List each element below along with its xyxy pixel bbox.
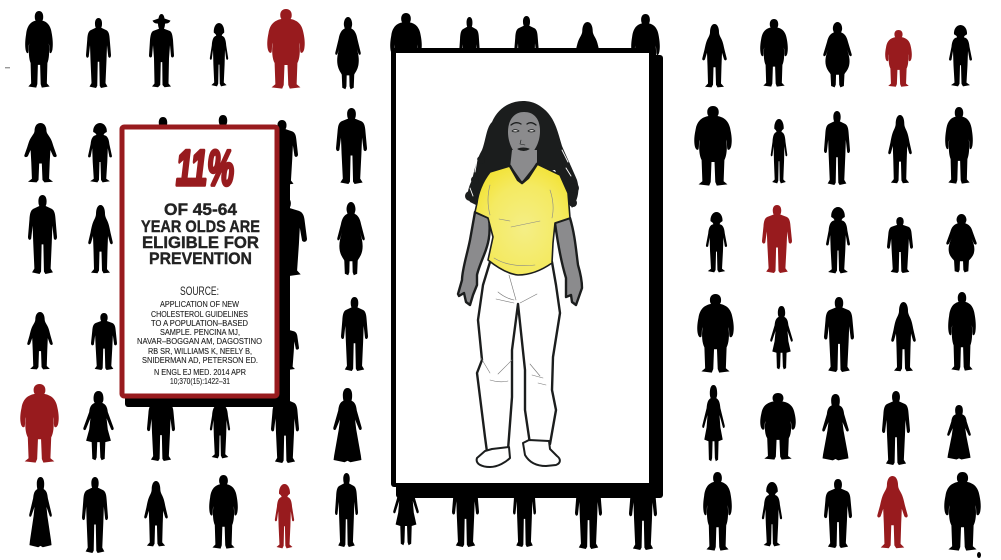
person [702,24,727,87]
shirt collar [510,164,537,183]
shirt creases [488,185,553,266]
person [703,472,732,551]
person [341,297,368,371]
crowd: left block [20,9,368,553]
statistic description [141,200,260,268]
left arm [458,212,490,305]
red highlighted person [267,9,305,89]
person [24,123,57,182]
person behind card [271,390,299,463]
red highlighted person [877,476,908,548]
person [83,391,114,460]
person [91,313,117,370]
statistic description: ELIGIBLE FOR [142,233,259,252]
person [336,108,367,184]
panel: statistic card [122,127,290,407]
right arm [555,218,582,305]
source citation: RB SR, WILLIAMS K, NEELY B, [148,346,252,356]
person [210,23,228,86]
source citation: SNIDERMAN AD, PETERSON ED. [142,355,258,365]
source citation: NAVAR–BOGGAN AM, DAGOSTINO [137,336,262,346]
person [28,195,57,274]
red highlighted person [20,384,59,463]
face [508,112,540,160]
person [946,214,977,272]
person in gown [333,388,362,462]
neck [510,150,537,184]
person [575,472,602,549]
person [771,119,787,183]
source citation [137,299,262,386]
right shoe [523,440,560,466]
person [949,25,972,86]
person behind card [262,197,307,276]
woman illustration [458,101,582,467]
source citation: 10;370(15):1422–31 [170,376,230,386]
source citation: APPLICATION OF NEW [160,299,240,309]
person [694,106,732,186]
person [824,297,854,372]
person in gown [822,394,849,460]
person in dress [770,306,793,369]
statistic description: PREVENTION [149,249,252,268]
source citation: N ENGL EJ MED. 2014 APR [154,367,246,377]
person with hat [824,111,850,185]
crowd: behind centre panel [390,13,660,550]
hair [465,101,579,208]
source citation: CHOLESTEROL GUIDELINES [151,309,248,319]
person [335,17,361,89]
person [25,11,53,88]
person behind card [266,120,298,185]
person [945,107,973,184]
person [826,207,850,273]
red highlighted person [762,205,792,273]
person behind card [147,392,175,461]
person [823,22,852,87]
person [944,472,981,551]
red highlighted person [275,484,294,548]
red highlighted person [885,30,912,87]
person [86,18,111,88]
left shoe [477,447,510,467]
person [947,405,971,459]
person [390,13,422,88]
person [631,14,660,89]
person [824,479,852,548]
person behind card [210,392,230,458]
person [513,472,536,547]
person [88,205,113,273]
person [27,312,53,369]
pants [477,262,560,452]
facial features [511,123,536,150]
panel: centre portrait frame [391,48,663,498]
person [706,212,727,272]
statistic description: OF 45-64 [164,200,238,219]
person [573,22,602,91]
person [144,481,168,546]
person [887,217,913,273]
person [891,302,916,371]
statistic description: YEAR OLDS ARE [141,217,260,236]
person [29,477,52,547]
person [760,393,796,460]
person [452,472,479,547]
person behind card [270,323,299,370]
pants creases [481,275,546,385]
source citation: TO A POPULATION–BASED [151,318,248,328]
crowd: right block [694,19,981,551]
person [82,477,108,553]
person [762,482,782,546]
person [629,472,657,550]
person [459,17,480,87]
person [882,391,910,465]
person [948,292,976,371]
person [702,385,725,461]
person with hat [149,14,174,87]
source heading: SOURCE: [180,286,219,298]
source citation: SAMPLE. PENCINA MJ, [160,327,240,337]
yellow shirt [475,164,570,275]
person [697,294,734,373]
person [760,19,788,87]
hair curl highlights [470,150,571,196]
person behind card [148,117,178,187]
person [888,115,912,183]
person [337,202,365,275]
person [393,472,419,545]
person [514,16,539,86]
person [209,475,238,549]
person behind card [208,115,238,185]
person [88,123,112,182]
person [335,473,358,547]
big statistic: 11% [176,140,234,196]
